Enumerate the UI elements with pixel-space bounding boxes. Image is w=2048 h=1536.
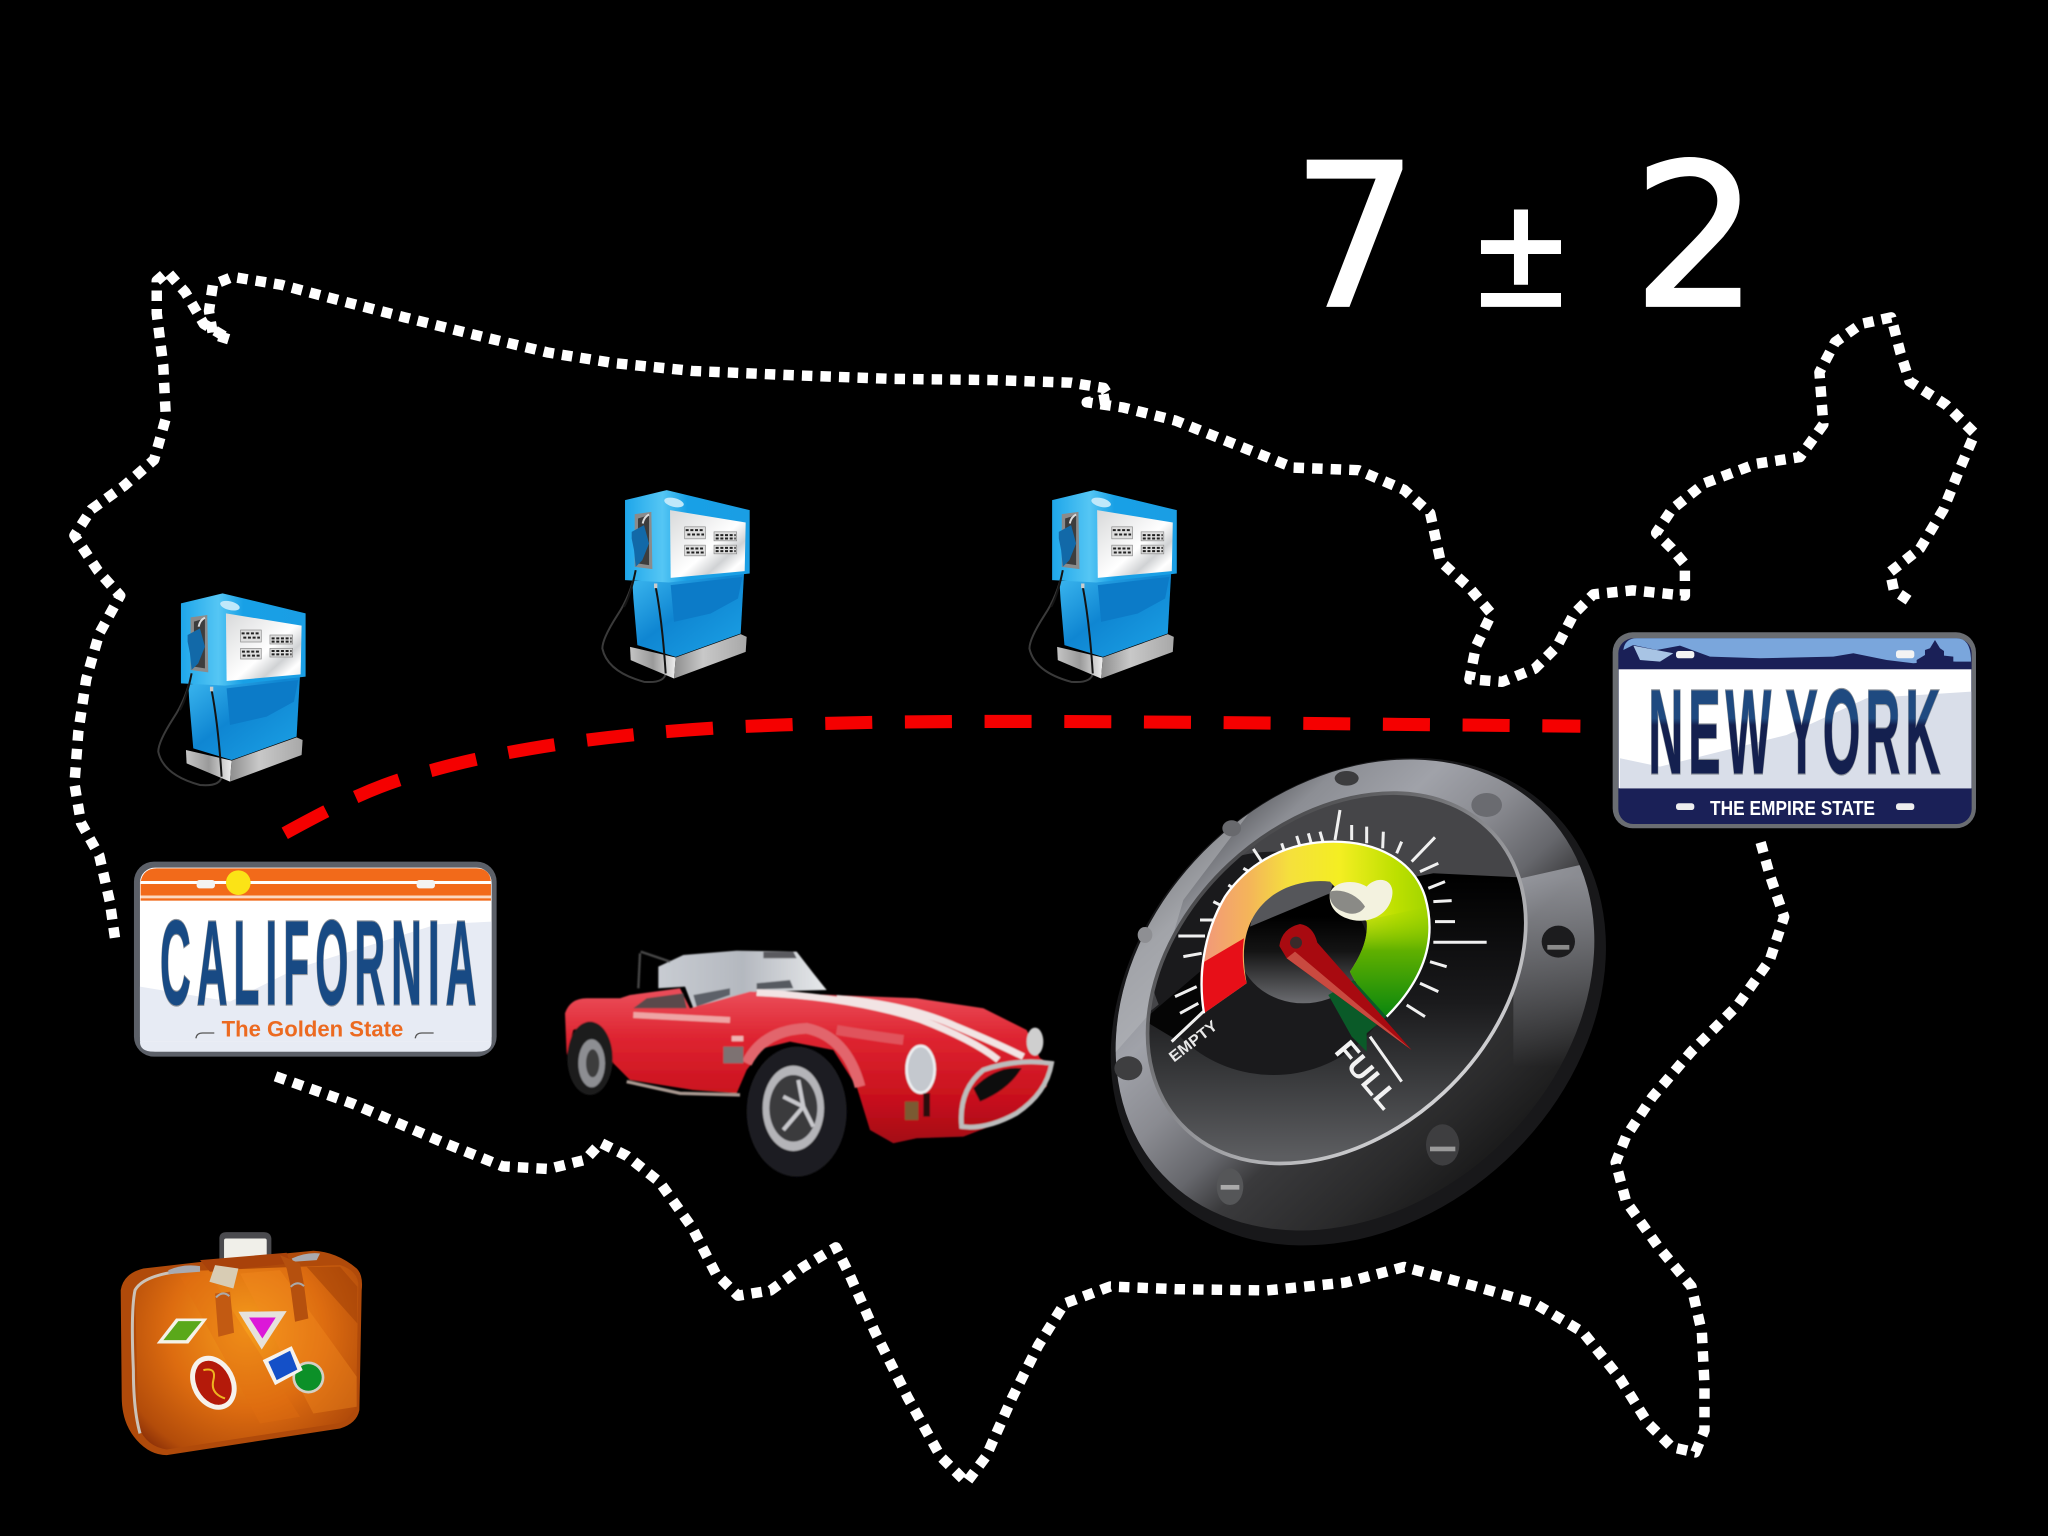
icon: fuel pump 1 [158,593,306,785]
marker [905,1102,918,1120]
gauge face [1149,794,1524,1162]
tick marks [1172,810,1487,1082]
side vent [723,1047,743,1063]
plate state name: NEW YORK [1648,664,1945,800]
title: 7 ± 2: 7 [1292,122,1418,353]
handle [219,1232,271,1263]
sill [627,1082,740,1095]
sticker: oval [181,1348,246,1418]
windshield [658,951,827,1008]
needle [1279,924,1412,1050]
arc highlight [1330,880,1392,921]
sticker: green circle [292,1361,324,1393]
grille [973,1068,1022,1102]
map outline: north and east coast [74,272,1975,938]
title: 7 ± 2: 2 [1633,122,1759,353]
sun [226,870,251,895]
map outline: south coast [272,842,1784,1482]
route: red dashed line [285,721,1580,833]
side trim [633,1015,730,1020]
plate slogan: The Golden State [222,1017,403,1042]
headlight [907,1046,935,1093]
color arc [1202,842,1430,1017]
icon: fuel gauge [1110,758,1606,1246]
fender highlight [747,1028,860,1087]
icon: suitcase [121,1232,362,1455]
straps [200,1253,290,1272]
icon: fuel pump 3 [1029,490,1177,682]
buckle [209,1265,238,1288]
hood stripes [757,993,998,1060]
gauge label: full: FULL [1328,1034,1404,1116]
screws [1335,771,1359,786]
gauge label: empty: EMPTY [1166,1017,1221,1066]
body [565,988,1050,1143]
sticker: triangle [238,1311,287,1349]
icon: red sports car [565,951,1052,1177]
sticker: blue [263,1346,303,1385]
plate state name: CALIFORNIA [160,896,482,1031]
cockpit [633,993,687,1008]
plate slogan: THE EMPIRE STATE [1710,797,1875,820]
license plate: New York [1613,632,1976,828]
front wheel [747,1047,847,1177]
title: 7 ± 2: ± [1477,162,1565,340]
gauge hub [1238,890,1368,1003]
license plate: California [134,862,497,1057]
rear wheel [567,1022,613,1095]
icon: fuel pump 2 [602,490,750,682]
needle shadow [1328,980,1387,1052]
sticker: green [157,1318,207,1343]
